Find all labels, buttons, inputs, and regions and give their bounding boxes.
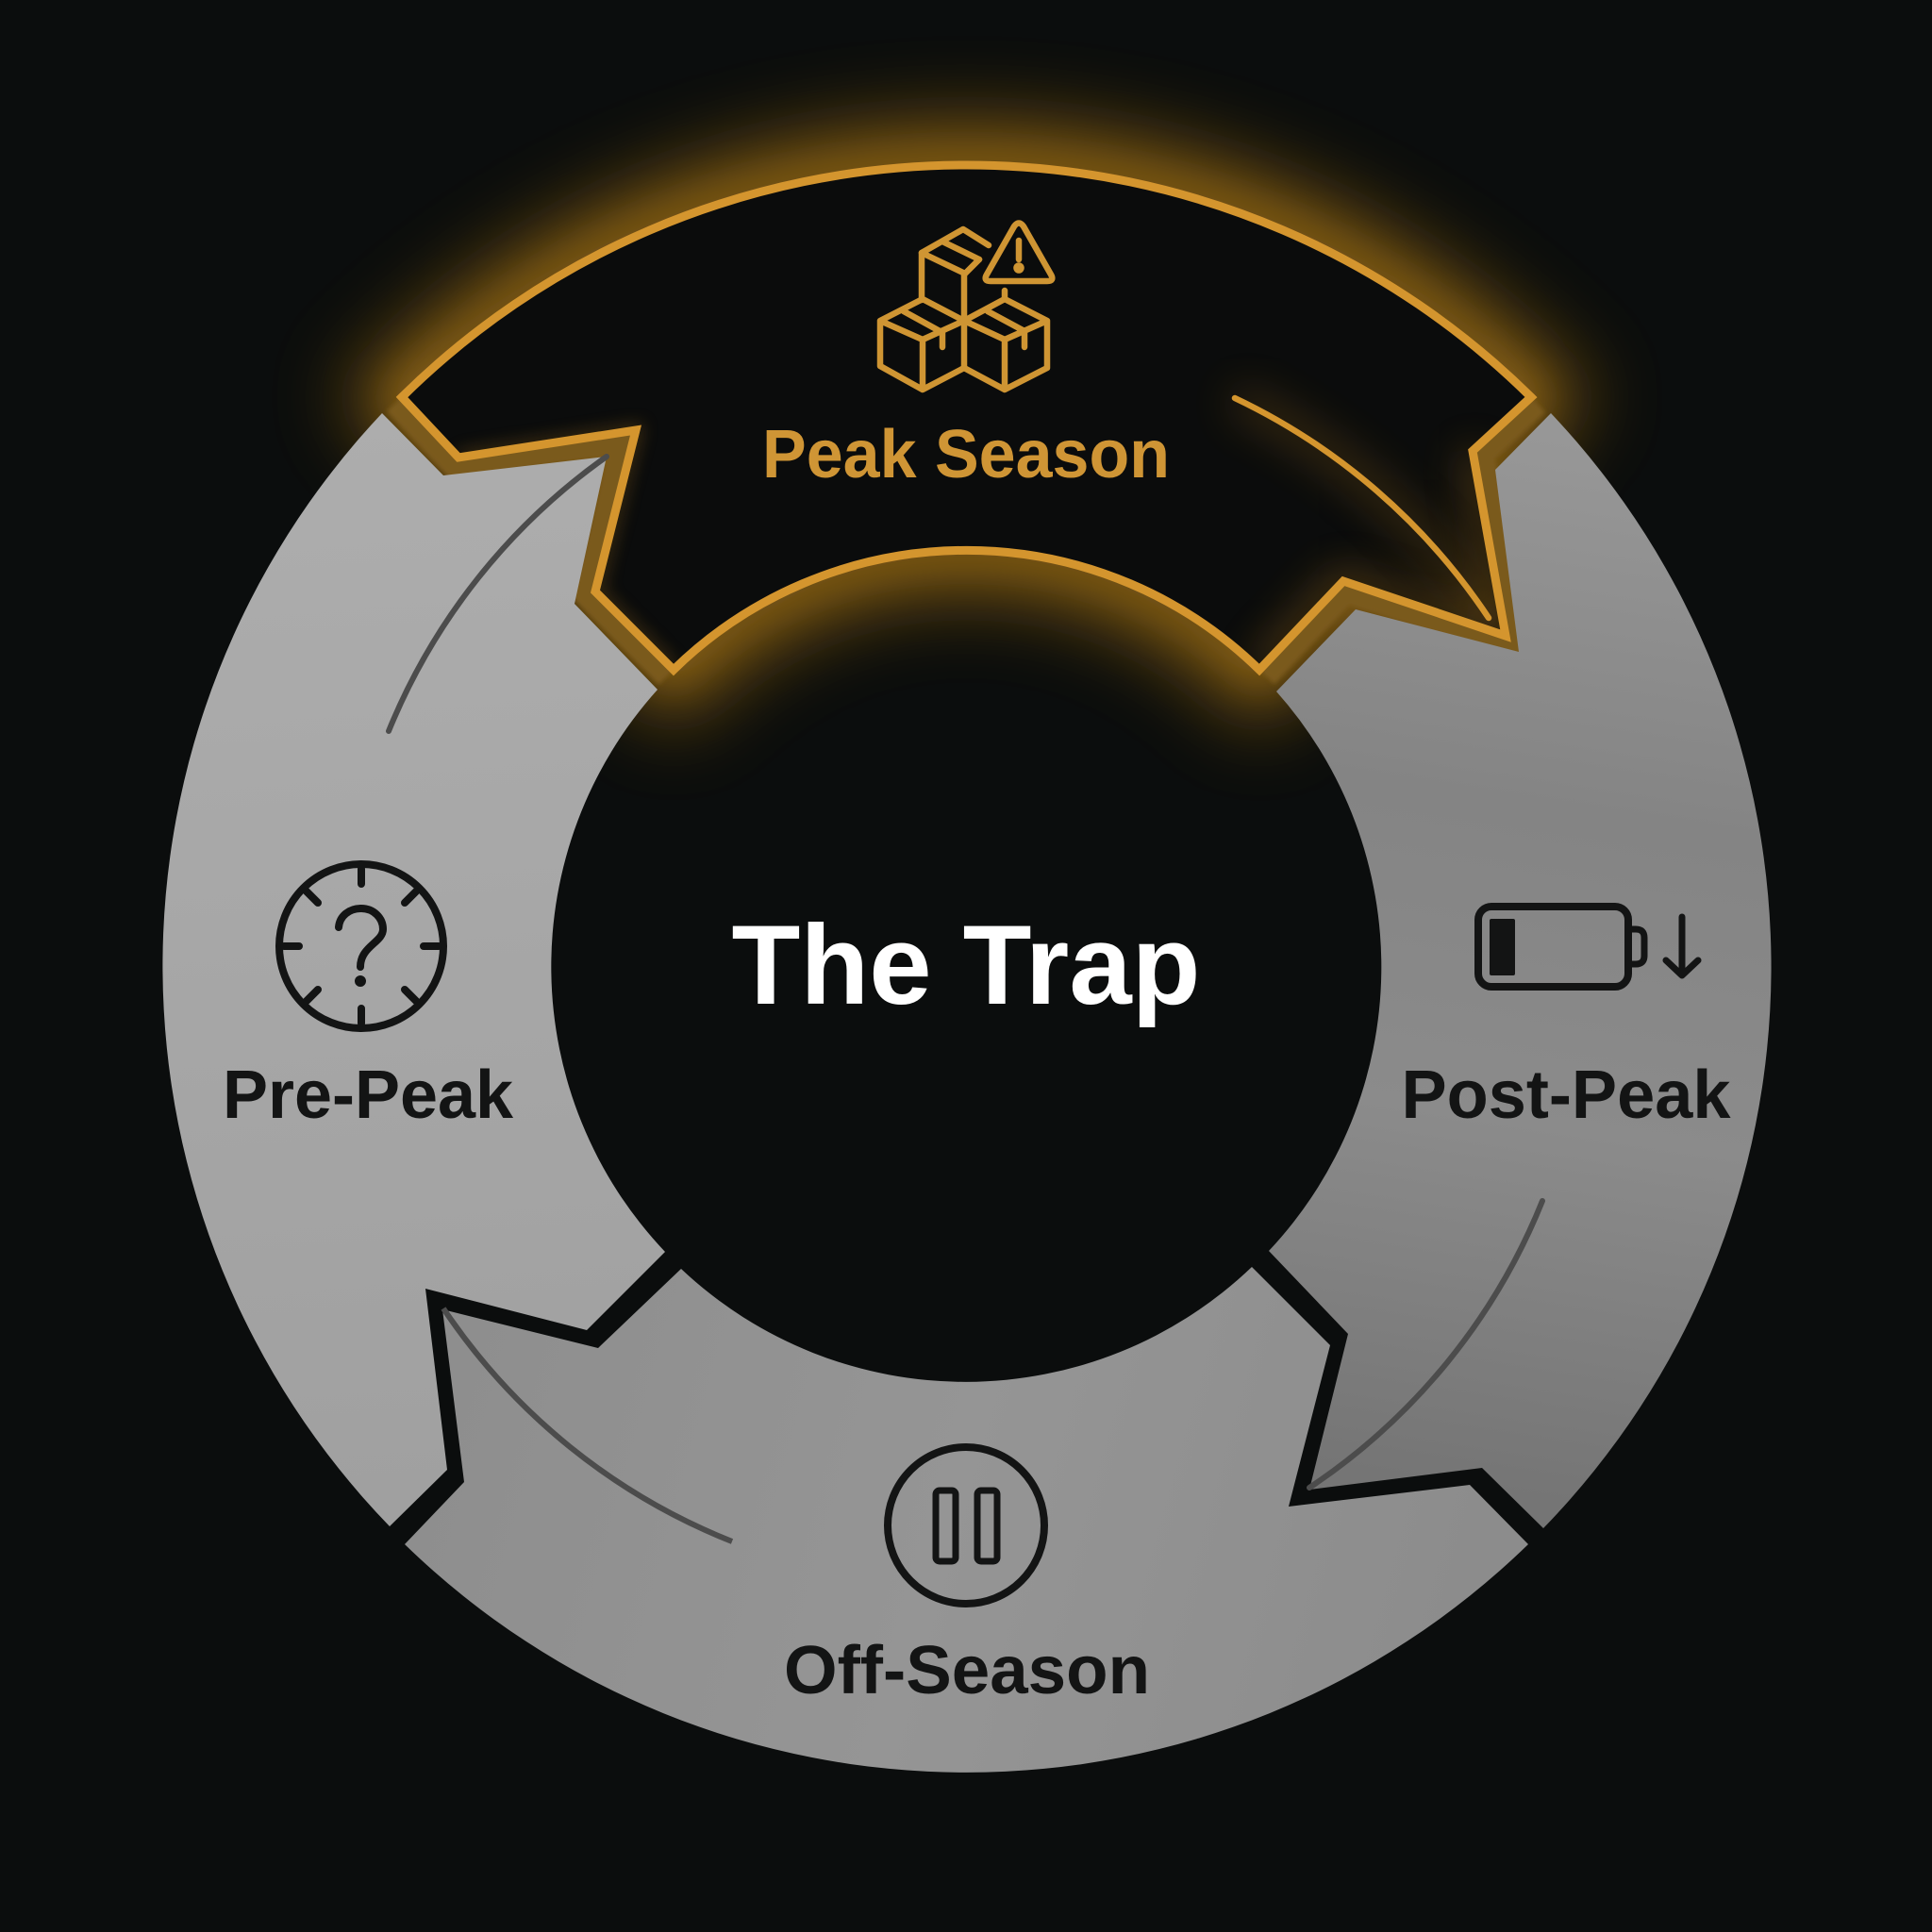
title: The Trap: The Trap bbox=[732, 902, 1200, 1028]
peak segment outline bbox=[402, 165, 1531, 670]
label: Pre-Peak: Pre-Peak bbox=[223, 1058, 514, 1133]
arrow line: off-season to pre-peak bbox=[443, 1308, 732, 1541]
icon: boxes with warning triangle bbox=[880, 223, 1052, 390]
arrow line: post-peak to off-season bbox=[1309, 1201, 1542, 1488]
panel: off-season segment bbox=[405, 1267, 1528, 1773]
panel: pre-peak segment bbox=[162, 413, 665, 1526]
icon: pause button bbox=[888, 1447, 1044, 1604]
glow behind peak segment bbox=[402, 165, 1531, 670]
label: Peak Season: Peak Season bbox=[762, 417, 1170, 492]
infographic: seasonal cycle ring bbox=[162, 70, 1772, 1773]
inner glow of peak segment bbox=[458, 398, 1506, 670]
panel: post-peak segment bbox=[1269, 413, 1772, 1528]
arrow line: pre-peak to peak bbox=[389, 457, 607, 731]
icon: low battery with down arrow bbox=[1478, 907, 1698, 987]
label: Post-Peak: Post-Peak bbox=[1402, 1058, 1731, 1133]
panel: peak season segment bbox=[402, 165, 1531, 670]
label: Off-Season: Off-Season bbox=[784, 1633, 1150, 1708]
icon: clock with question mark bbox=[279, 864, 443, 1028]
arrow line: peak to post-peak bbox=[1235, 398, 1489, 618]
